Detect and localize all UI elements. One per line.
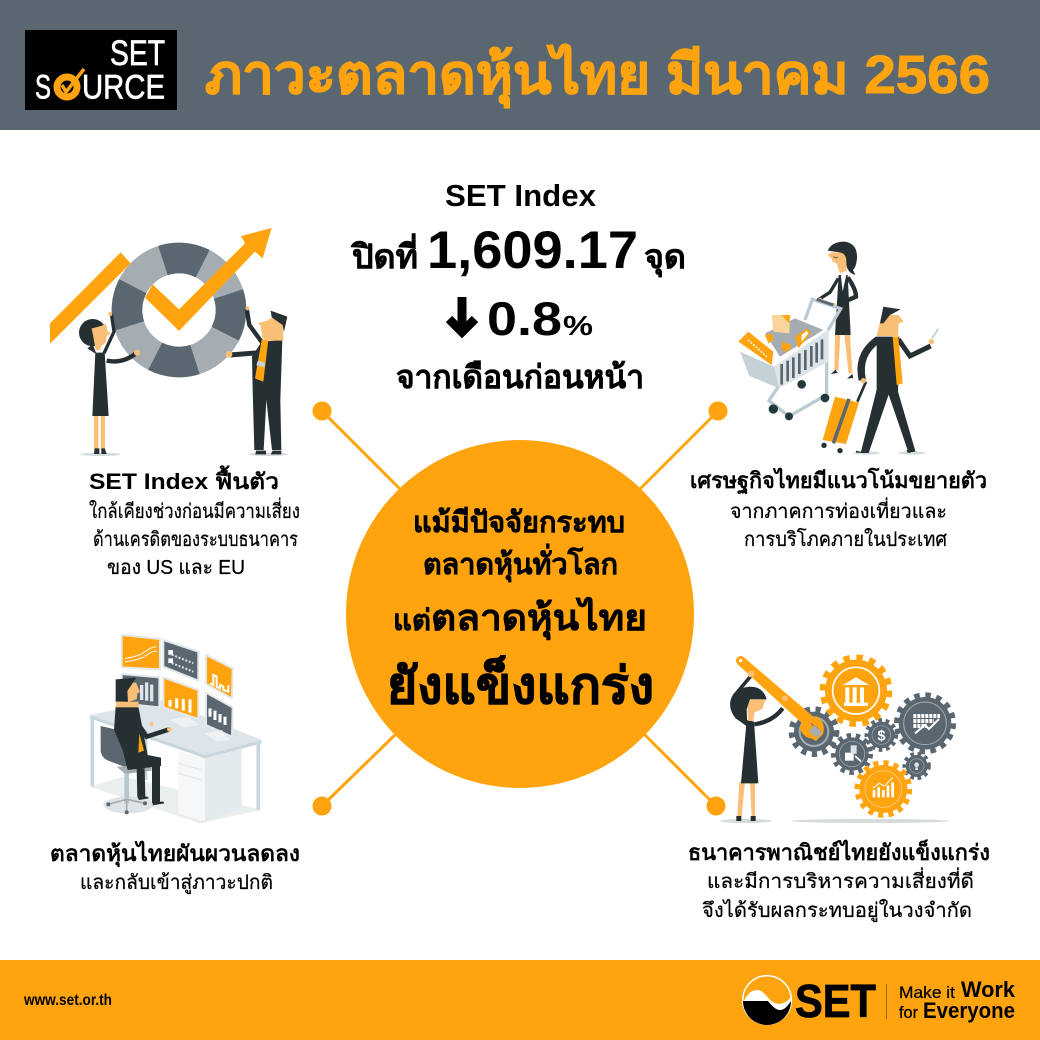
SET Source logo: SET [110,34,165,73]
SET logo: Work [961,977,1016,1002]
gear: lightbulb [904,754,929,778]
illustration: ring and rising arrow [50,228,288,456]
SET logo [743,975,1016,1027]
SET logo: Everyone [923,998,1015,1023]
SET Index summary: % [563,310,593,341]
central orange circle: ตลาดหุ้นไทย [431,596,647,641]
website: www.set.or.th [23,992,112,1009]
SET Source logo [25,30,177,110]
footer band [0,960,1040,1040]
desk [90,700,262,822]
text block: SET Index recovery: ใกล้เคียงช่วงก่อนมีความเสี่ยง [89,497,300,523]
wrench [736,656,824,741]
text block: commercial banks: ธนาคารพาณิชย์ไทยยังแข็งแกร่ง [688,838,990,865]
woman figure [79,312,140,454]
SET logo: for [899,1003,918,1022]
illustration: trader at desk [90,635,262,823]
chair [101,726,152,814]
central orange circle: แม้มีปัจจัยกระทบ [413,507,625,539]
SET Index summary: 1,609.17 [427,221,638,280]
monitors [122,635,233,737]
text block: commercial banks: และมีการบริหารความเสี่ยงที่ดี [707,867,974,893]
SET logo: SET [795,975,876,1027]
text block: SET Index recovery: ด้านเครดิตของระบบธนาคาร [93,529,298,551]
text block: commercial banks [688,838,990,923]
trader figure [114,678,172,805]
SET Index summary [351,178,686,395]
gear: bank [823,658,889,724]
SET logo: Make it [899,983,955,1002]
text block: SET Index recovery: SET Index ฟื้นตัว [89,465,279,494]
illustration: woman with wrench and gears [720,656,953,823]
SET Source logo: S [35,68,51,106]
text block: SET Index recovery: ของ US และ EU [107,557,245,579]
text block: market volatility: และกลับเข้าสู่ภาวะปกติ [80,872,273,895]
woman figure [730,671,788,821]
cart [738,299,841,420]
SET Index summary: SET Index [445,178,597,213]
central orange circle: ตลาดหุ้นทั่วโลก [423,543,618,582]
illustration: shopping cart and traveller [738,242,938,455]
SET Index summary: จากเดือนก่อนหน้า [396,359,644,395]
text block: commercial banks: จึงได้รับผลกระทบอยู่ในวงจำกัด [702,899,972,923]
SET Source logo: URCE [82,68,165,106]
central orange circle [346,440,694,788]
gear: coins [834,736,870,772]
woman pushing cart [818,242,857,379]
monitor charts [125,647,230,742]
connector lines [314,403,726,814]
traveller man [821,307,938,453]
text block: economy: จากภาคการท่องเที่ยวและ [730,497,947,523]
man figure [226,306,287,454]
central orange circle: ยังแข็งแกร่ง [387,655,654,714]
central orange circle: แต่ [393,605,431,637]
text block: economy: การบริโภคภายในประเทศ [744,528,947,551]
SET Index summary: ปิดที่ [351,233,418,275]
gear: dollar: $ [877,729,885,745]
gear: chart large [897,695,953,751]
text block: economy [690,467,987,551]
text block: economy: เศรษฐกิจไทยมีแนวโน้มขยายตัว [690,467,987,495]
header band [0,0,1040,130]
gear: dollar [867,720,896,750]
text block: market volatility [50,840,300,895]
gear: growth chart [857,763,909,815]
SET Index summary: จุด [644,238,686,278]
text block: SET Index recovery [89,465,300,579]
grey gear with wrench [792,710,836,754]
down arrow [449,297,475,332]
text block: market volatility: ตลาดหุ้นไทยผันผวนลดลง [50,840,300,868]
SET Index summary: 0.8 [487,292,562,345]
title: ภาวะตลาดหุ้นไทย มีนาคม 2566 [205,43,990,109]
